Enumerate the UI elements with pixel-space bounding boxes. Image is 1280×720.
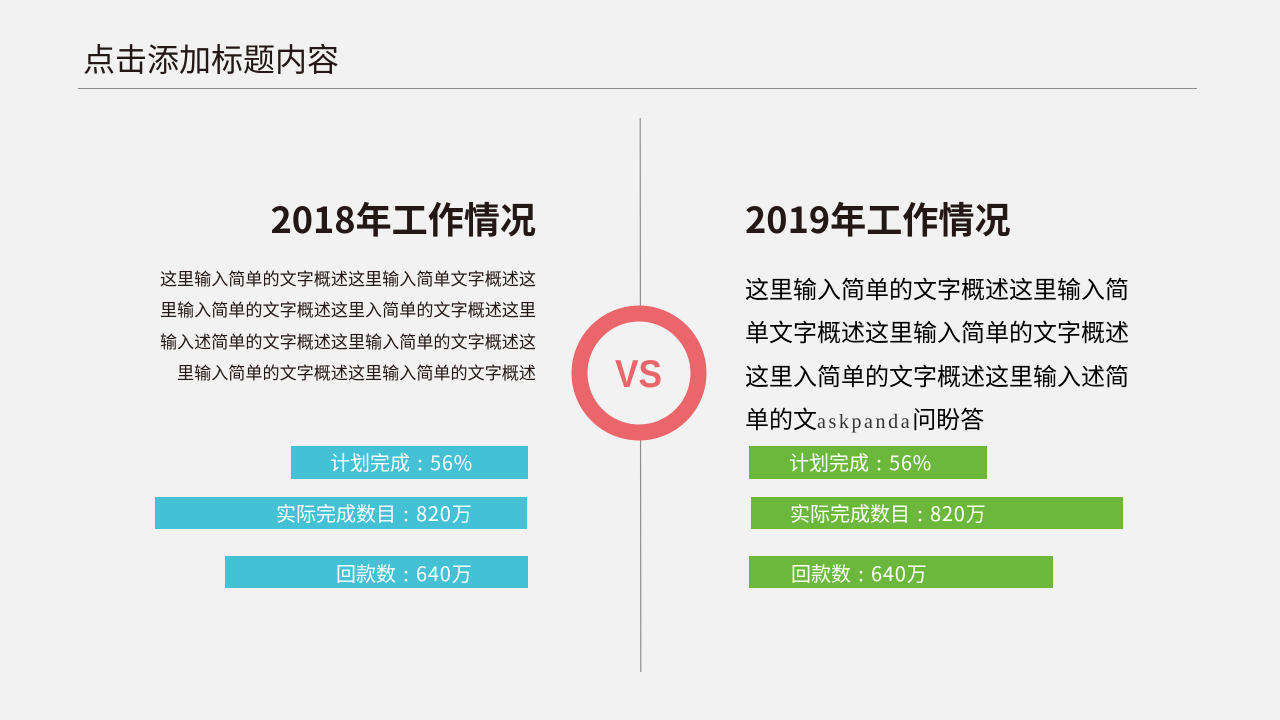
bar: 2019 plan completion: 计划完成 56% (789, 447, 932, 476)
bar: 2019 payments: 回款数 640万 (791, 558, 927, 587)
icon: VS badge (572, 306, 706, 440)
heading: 2019: 2019年工作情况 (745, 192, 1011, 244)
heading: 2018: 2018年工作情况 (270, 192, 536, 244)
bar: 2018 actual completion (155, 497, 527, 529)
bar: 2019 plan completion: : (876, 447, 882, 476)
icon: VS badge: VS (615, 353, 662, 396)
text block: 2019 description: 这里输入简单的文字概述这里输入简 (745, 270, 1129, 305)
bar: 2019 payments: : (858, 558, 864, 587)
text block: 2019 description (745, 270, 1129, 435)
text block: 2019 description: 这里入简单的文字概述这里输入述简 (745, 357, 1129, 392)
text block: 2018 description: 里输入简单的文字概述这里入简单的文字概述这里 (160, 296, 536, 321)
text block: 2018 description (160, 265, 536, 384)
title: 点击添加标题内容 (83, 35, 339, 81)
bar: 2018 payments (225, 556, 528, 588)
text block: 2018 description: 输入述简单的文字概述这里输入简单的文字概述这 (160, 328, 536, 353)
bar: 2019 actual completion: : (917, 498, 923, 527)
bar: 2018 payments: 回款数 640万 (336, 558, 472, 587)
bar: 2018 payments: : (403, 558, 409, 587)
text block: 2019 description: 单文字概述这里输入简单的文字概述 (745, 313, 1129, 348)
header rule (78, 88, 1197, 89)
text block: 2018 description: 这里输入简单的文字概述这里输入简单文字概述这 (160, 265, 536, 290)
bar: 2019 payments (749, 556, 1053, 588)
bar: 2018 actual completion: : (403, 498, 409, 527)
bar: 2018 actual completion: 实际完成数目 820万 (276, 498, 472, 527)
bar: 2018 plan completion (291, 446, 528, 479)
center divider line (640, 118, 642, 672)
bar: 2019 plan completion (749, 446, 987, 479)
text block: 2018 description: 里输入简单的文字概述这里输入简单的文字概述 (177, 359, 536, 384)
bar: 2019 actual completion (751, 497, 1123, 529)
bar: 2019 actual completion: 实际完成数目 820万 (790, 498, 986, 527)
bar: 2018 plan completion: 计划完成 56% (330, 447, 473, 476)
bar: 2018 plan completion: : (417, 447, 423, 476)
text block: 2019 description: 单的文askpanda问盼答 (745, 400, 984, 435)
